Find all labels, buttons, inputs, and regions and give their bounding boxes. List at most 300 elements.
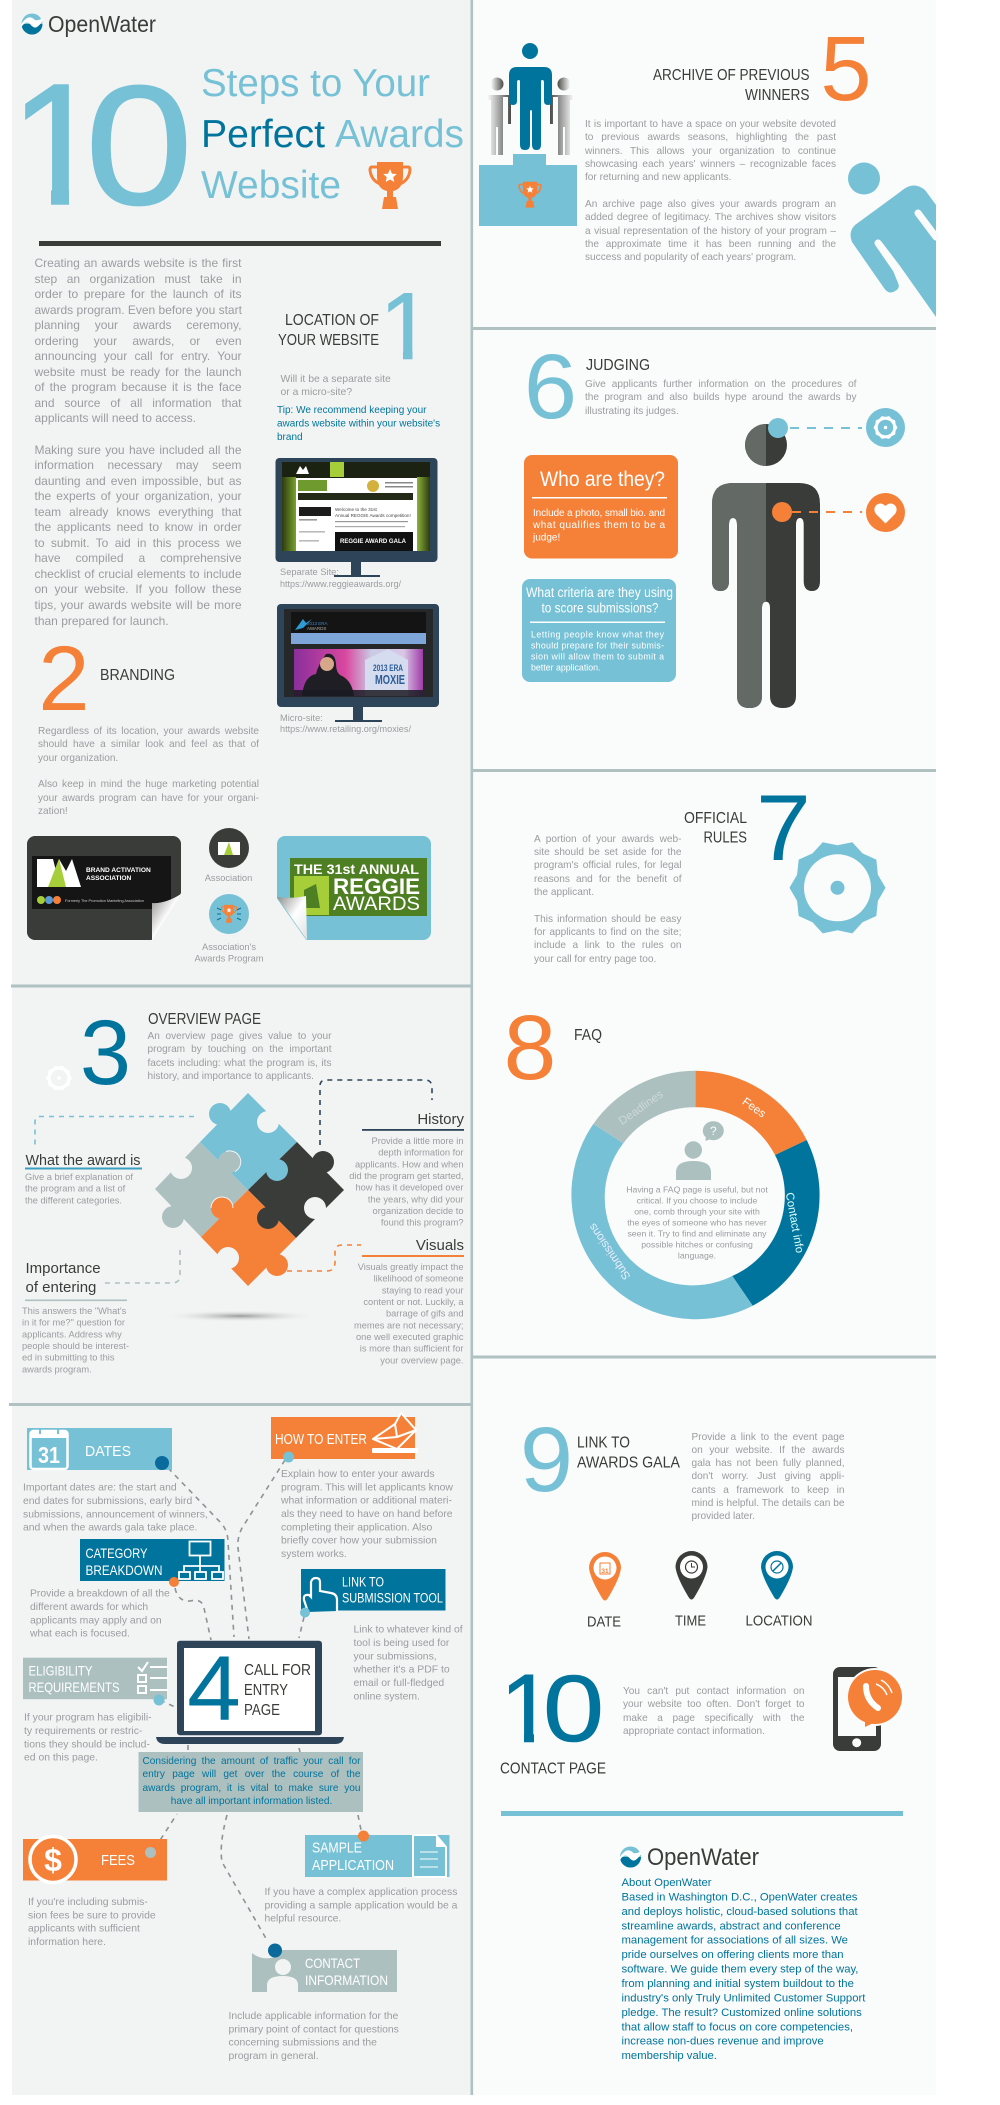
tip text: Tip: We recommend keeping your [277,405,427,416]
heading: FAQ [574,1027,602,1044]
text block: don't worry. Just giving appli- [692,1471,844,1482]
card: what criteria: to score submissions? [542,601,658,616]
text block: to previous awards seasons, highlighting the past [585,132,836,143]
text: fees: information here. [28,1937,106,1948]
monitor: micro-site [277,604,439,722]
text: how to enter: briefly cover how your submission [281,1536,437,1547]
text block: introduction: awards program. Even before you start [34,303,242,317]
label: history: depth information for [378,1148,464,1158]
label: visuals: barrage of gifs and [386,1309,464,1319]
text block [585,378,856,423]
label: association: Association [205,873,252,883]
text: dates: Important dates are: the start and [23,1483,177,1494]
text block: Regardless of its location, your awards website [38,726,259,737]
icon: laptop with heading: CALL FOR [244,1662,311,1679]
label: importance of entering: in it for me?" question for [22,1318,125,1328]
text block: program by touching on the important [148,1044,332,1055]
tag: category breakdown: BREAKDOWN [86,1562,162,1578]
text block: introduction: on your website. If you follow these [34,582,242,596]
label: history [349,1111,464,1228]
text block: introduction: website must be ready for the launch [34,365,242,379]
card: who are they: Include a photo, small bio. and [533,508,665,519]
segment: contact info: Contact info [783,1192,805,1254]
text: fees: If you're including submis- [28,1897,148,1908]
text: how to enter: system works. [281,1549,347,1560]
heading: RULES [704,830,747,847]
tag: contact information: CONTACT [305,1955,360,1971]
monitor: separate site [276,458,438,577]
monitor: micro-site: AWARDS [307,626,326,631]
segment: submissions [571,1124,753,1319]
tag: fees [23,1836,167,1882]
callout text: Considering the amount of traffic your call for [142,1756,360,1767]
heading: ARCHIVE OF PREVIOUS [653,67,810,84]
divider between sections 2 and 3 [11,984,471,988]
text: link to submission tool: Link to whatever kind of [354,1625,463,1636]
icon: podium with winners [479,43,577,226]
label: visuals: Visuals greatly impact the [358,1262,464,1272]
heading: LINK TO [577,1435,630,1452]
text: how to enter: Explain how to enter your awards [281,1469,435,1480]
label: history: History [417,1111,464,1128]
text block: facets including: what the program is, its [148,1058,332,1069]
text block: appropriate contact information. [623,1726,765,1737]
tag: dates: 31 [38,1442,60,1468]
numeral 5: 5 [820,18,872,120]
section 2: branding [27,628,431,964]
section 3: overview page [22,1002,464,1374]
tag: dates [27,1428,172,1470]
text block: introduction: team already knows everything that [34,505,242,519]
text block: introduction: the applicants need to know in order [34,520,242,534]
text: how to enter: completing their application. Also [281,1522,433,1533]
tag: link to submission tool: LINK TO [342,1575,384,1590]
text block: introduction: of the program because it is the face [34,380,242,394]
numeral 7: 7 [756,776,811,880]
label: visuals: Visuals [416,1237,464,1254]
text: dates: end dates for submissions, early bird [23,1496,192,1507]
text block: added degree of legitimacy. The archives show visitors [585,212,836,223]
section 10: contact page [500,1667,902,1774]
text block: introduction: tips, your awards website will be more [34,598,242,612]
tag: fees: FEES [101,1852,135,1869]
label: location: LOCATION [746,1613,812,1630]
question text: Will it be a separate site [280,374,391,385]
section 8: FAQ [504,995,820,1319]
card: who are they: Who are they? [540,467,665,491]
heading: JUDGING [586,357,650,374]
icon: association logo badge [209,828,249,868]
text: eligibility requirements: If your program has eligibili- [24,1713,152,1724]
title text: Awards [335,113,464,156]
text block: reasons and for the benefit of [534,874,682,885]
title numeral: 10: 1 [9,47,106,241]
card: who are they: judge! [532,532,560,544]
footer: about OpenWater [620,1844,866,2062]
text block [692,1430,844,1530]
text block: introduction: ordering your awards, or even [34,334,242,348]
connector: head to gear [768,408,905,447]
segment: deadlines [593,1071,695,1143]
caption: separate site: Separate Site: [280,567,339,577]
tag: link to submission tool: SUBMISSION TOOL [342,1591,443,1606]
puzzle shadow [162,1310,318,1322]
icon: person with question bubble [676,1121,724,1180]
text block: gala has not been fully planned, [692,1458,844,1469]
label: visuals: likelihood of someone [374,1274,464,1284]
text: sample application: helpful resource. [264,1914,341,1925]
label: visuals: is more than sufficient for [360,1344,464,1354]
text block [148,1030,332,1090]
text: sample application: If you have a complex application process [264,1887,457,1898]
text block: introduction: planning your awards ceremony, [34,318,242,332]
title text: Steps to Your [201,62,430,105]
callout text: awards program, it is vital to make sure you [142,1783,360,1794]
connector: visuals [287,1245,361,1271]
callout box [138,1752,363,1812]
text: dates: and when the awards gala take place. [23,1523,197,1534]
heading: OVERVIEW PAGE [148,1011,261,1028]
monitor: separate site: Welcome to the 31st [335,507,378,512]
label: visuals: one well executed graphic [356,1332,464,1342]
icon: laptop with heading [156,1637,344,1744]
divider between sections 3 and 4 [9,1403,471,1406]
label: visuals [354,1237,464,1365]
about text: increase non-dues revenue and improve [622,2036,824,2048]
callout text [142,1755,360,1811]
tag: eligibility requirements: REQUIREMENTS [28,1679,120,1695]
text block: introduction: have compiled a comprehensive [34,551,242,565]
label: history: Provide a little more in [372,1136,464,1146]
text block: An archive page also gives your awards program an [585,199,836,210]
card: awards program brand: REGGIE [333,874,420,899]
text block: introduction: checklist of crucial elements to include [34,567,242,581]
icon: date pin: 31 [601,1568,609,1575]
section 6: judging [522,335,905,708]
tag: link to submission tool [300,1569,446,1618]
monitor: micro-site: 2013 ERA [373,663,403,673]
numeral 10: 1 [500,1654,554,1763]
numeral 10: 0 [543,1655,604,1761]
label: what the award is [25,1152,142,1205]
label: importance of entering: applicants. Address why [22,1329,122,1339]
text block: Having a FAQ page is useful, but not [626,1185,768,1195]
text: link to submission tool: your submissions, [354,1651,437,1662]
text: category breakdown: Provide a breakdown of all the [30,1589,170,1600]
text block: your organization. [38,753,118,764]
tag: contact information [252,1944,397,1992]
numeral 8: 8 [504,995,556,1099]
card: who are they: what qualifies them to be a [532,520,665,531]
label: importance of entering [22,1260,129,1374]
title text: Website [201,164,341,207]
text: contact information: primary point of contact for questions [228,2024,399,2035]
footer rule [501,1811,903,1816]
tag: sample application [305,1830,450,1877]
label: what the award is: the program and a list of [25,1184,126,1194]
text block: Also keep in mind the huge marketing potential [38,779,259,790]
card: awards program brand [276,836,431,941]
icon: trophy [370,162,410,209]
text block: cants a framework to keep in [692,1485,844,1496]
caption: micro-site: Micro-site: [280,713,323,723]
title numeral: 10: 0 [85,50,193,240]
heading: AWARDS GALA [577,1455,680,1472]
text block: introduction: Creating an awards website is the first [34,256,242,270]
text block: site should be set aside for the [534,847,682,858]
tag: dates: DATES [85,1443,131,1460]
tag: eligibility requirements: ELIGIBILITY [28,1663,93,1679]
segment: submissions: Submissions [587,1221,633,1282]
chart: donut of FAQ topics [571,1071,820,1319]
logo: OpenWater: OpenWater [647,1844,759,1871]
text block: include a link to the rules on [534,940,682,951]
numeral 2: 2 [38,628,90,730]
text block: introduction: the experts of your organization, your [34,489,242,503]
panel: left column background [12,0,471,2095]
heading: YOUR WEBSITE [278,332,379,349]
icon: large tilted figure [848,162,936,317]
text block: should have a similar look and feel as that of [38,739,259,750]
text block: introduction: order to prepare for the launch of its [34,287,242,301]
text block: introduction: and source of all information that [34,396,242,410]
question text: or a micro-site? [280,387,352,398]
text block: for returning and new applicants. [585,172,731,183]
label: history: did the program get started, [349,1171,464,1181]
text block [623,1685,804,1741]
card: what criteria: sion will allow them to submit a [531,651,664,661]
icon: date pin [589,1552,621,1600]
text block: history, and importance to applicants. [148,1071,314,1082]
tag: eligibility requirements [23,1658,168,1706]
monitor: micro-site: MOXIE [375,672,405,687]
about text: management for associations of all sizes. We [622,1935,848,1947]
caption: micro-site: https://www.retailing.org/moxies/ [280,724,411,734]
text block: introduction: information necessary may seem [34,458,242,472]
connector: heart [772,493,905,532]
section 7: official rules [534,776,886,973]
title numeral: 10 [25,84,186,206]
tag: fees: $ [44,1842,62,1878]
text: how to enter: als they need to have on hand before [281,1509,453,1520]
label: date: DATE [587,1614,621,1631]
label: importance of entering: people should be interest- [22,1341,129,1351]
text block: An overview page gives value to your [148,1031,332,1042]
callout text: have all important information listed. [171,1796,332,1807]
text block: provided later. [692,1511,755,1522]
monitor: micro-site: 2013 ERA [307,621,328,626]
connector: importance [103,1250,180,1283]
label: association's awards program: Association's [202,942,256,952]
text: link to submission tool: tool is being used for [354,1638,450,1649]
about text: pledge. The result? Customized online solutions [622,2007,862,2019]
text: eligibility requirements: tions they should be includ- [24,1739,150,1750]
divider between sections 8 and 9 [473,1356,936,1358]
label: association's awards program: Awards Program [194,954,264,964]
caption: separate site: https://www.reggieawards.org/ [280,579,401,589]
text block: Provide a link to the event page [692,1432,844,1442]
section 9: link to awards gala [520,1408,844,1631]
text block: introduction: to submit. To aid in this process we [34,536,242,550]
label: importance of entering: of entering [26,1279,96,1296]
heading: CONTACT PAGE [500,1760,606,1778]
text: category breakdown: different awards for which [30,1602,148,1613]
text block: illustrating its judges. [585,406,679,417]
label: visuals: staying to read your [382,1285,464,1295]
card: association brand: BRAND ACTIVATION [86,867,151,874]
text: eligibility requirements: ed on this page. [24,1753,98,1764]
text block: It is important to have a space on your website devoted [585,119,836,130]
text block: the eyes of someone who has never [627,1218,767,1228]
icon: faint gear [46,1066,72,1090]
about text: that allow staff to focus on core competencies, [622,2021,853,2033]
text block [38,725,259,825]
icon: time pin [676,1551,708,1600]
segment: fees [695,1071,807,1155]
text: category breakdown: what each is focused. [29,1629,130,1640]
icon: phone with speech bubble [833,1667,904,1751]
tag: how to enter: HOW TO ENTER [275,1431,367,1448]
text block: success and popularity of each years' program. [585,252,796,263]
text block: introduction [34,256,242,631]
numeral 9: 9 [520,1408,573,1511]
text: contact information: concerning submissions and the [228,2038,377,2049]
text: contact information: program in general. [228,2051,319,2062]
label: time: TIME [675,1613,706,1630]
text block: This information should be easy [534,914,682,925]
label: visuals: content or not. Luckily, a [363,1297,464,1307]
text block: for applicants to find on the site; [534,927,682,938]
text block: Give applicants further information on the procedures of [585,379,856,390]
text: link to submission tool: whether it's a PDF to [352,1665,450,1676]
heading: LOCATION OF [285,312,379,329]
about text: pride ourselves on offering clients more than [622,1949,844,1961]
about text: About OpenWater [622,1877,712,1889]
tip text: awards website within your website's [277,418,440,430]
text: contact information: Include applicable information for the [228,2011,399,2022]
about text: Based in Washington D.C., OpenWater creates [622,1891,858,1903]
text block: the program and also builds hype around the awards by [585,392,856,403]
text: eligibility requirements: ty requirements or restric- [24,1726,142,1737]
divider between sections 6 and 7 [473,769,936,772]
text block: introduction: daunting and even impossible, but as [34,474,242,488]
text: link to submission tool: online system. [354,1691,420,1702]
connector: history [320,1080,432,1145]
monitor: separate site: REGGIE AWARD GALA [340,538,406,545]
label: history: the years, why did your [368,1194,464,1204]
text block: program's official rules, for legal [534,860,682,871]
segment: contact info [732,1140,820,1306]
icon: gear [790,842,886,933]
card: what criteria: Letting people know what they [531,629,665,639]
text block: your call for entry page too. [534,954,656,965]
label: importance of entering: This answers the "What's [22,1306,127,1316]
text block: your awards program can have for your organi- [38,793,259,804]
card: what criteria: better application. [531,662,600,672]
text block [534,833,682,973]
about text: industry's only Truly Unlimited Customer Support [622,1992,866,2004]
text block: introduction: announcing your call for entry. Your [34,349,242,363]
text: link to submission tool: email or full-fledged [354,1678,444,1689]
tag: how to enter [271,1413,418,1462]
text block: language. [678,1251,716,1261]
chart: puzzle of four pieces [155,1093,344,1286]
card: who are they [524,455,678,558]
label: history: found this program? [381,1218,464,1228]
label: what the award is: What the award is [26,1152,140,1169]
numeral 3: 3 [80,1002,131,1104]
text block: critical. If you choose to include [637,1196,758,1206]
label: importance of entering: ed in submitting to this [22,1353,115,1363]
text block: possible hitches or confusing [641,1240,753,1250]
label: what the award is: the different categories. [25,1195,122,1205]
card: what criteria: What criteria are they using [526,585,673,600]
label: visuals: memes are not necessary; [354,1320,464,1330]
card: association brand [27,836,182,941]
segment: deadlines: Deadlines [617,1088,666,1128]
card: association brand: Formerly The Promotion Marketing Association [65,899,144,903]
about text: membership value. [622,2050,717,2062]
text block: make a page specifically with the [623,1713,804,1724]
about text: software. We guide them every step of the way, [622,1964,858,1976]
heading: BRANDING [100,667,175,684]
card: what criteria [522,579,676,682]
numeral 10 [509,1674,600,1742]
text: how to enter: what information or additional materi- [280,1496,452,1507]
heading: WINNERS [745,87,810,104]
card: association brand: ASSOCIATION [86,875,132,882]
label: history: applicants. How and when [355,1159,464,1169]
text block: introduction: Making sure you have included all the [34,443,242,457]
icon: awards program badge [209,894,249,934]
title text [201,62,464,207]
icon: location pin [761,1551,793,1600]
text block: mind is helpful. The details can be [692,1498,844,1509]
title rule [39,241,441,246]
monitor: separate site: Annual REGGIE Awards competition! [335,513,411,518]
panel: right column background [473,0,936,2095]
text: sample application: providing a sample application would be a [264,1900,458,1911]
card: awards program brand: THE 31st ANNUAL [294,861,419,877]
section 5: archive of previous winners [479,18,936,317]
card: what criteria: should prepare for their submis- [531,640,664,650]
heading [278,312,379,349]
text block: your website too often. Don't forget to [623,1699,804,1710]
numeral 6: 6 [524,335,577,438]
header: logo and title [22,14,463,209]
text: category breakdown: applicants may apply and on [30,1615,162,1626]
text: fees: applicants with sufficient [28,1924,140,1935]
title text: Perfect [201,113,325,156]
text block: showcasing each years' winners – recognizable faces [585,159,836,170]
text block: winners. This allows your organization to continue [585,146,836,157]
connector: what the award is [35,1116,194,1146]
label: what the award is: Give a brief explanation of [25,1172,133,1182]
tag: contact information: INFORMATION [305,1972,388,1988]
column divider [470,0,473,2095]
section 1: location of your website [276,273,440,734]
about text: from planning and initial system buildout to the [622,1978,854,1990]
text block: A portion of your awards web- [534,834,682,845]
connectors: dashed lines to laptop [155,1460,361,1942]
text: fees: sion fees be sure to provide [28,1910,156,1921]
callout text: entry page will get over the course of the [142,1769,360,1780]
tag: category breakdown: CATEGORY [86,1545,148,1561]
numeral 1: 1 [379,273,433,380]
text block: seen it. Try to find and eliminate any [627,1229,767,1239]
about text: and deploys holistic, cloud-based solutions that [622,1906,858,1918]
text: dates: submissions, announcement of winners, [23,1509,208,1520]
